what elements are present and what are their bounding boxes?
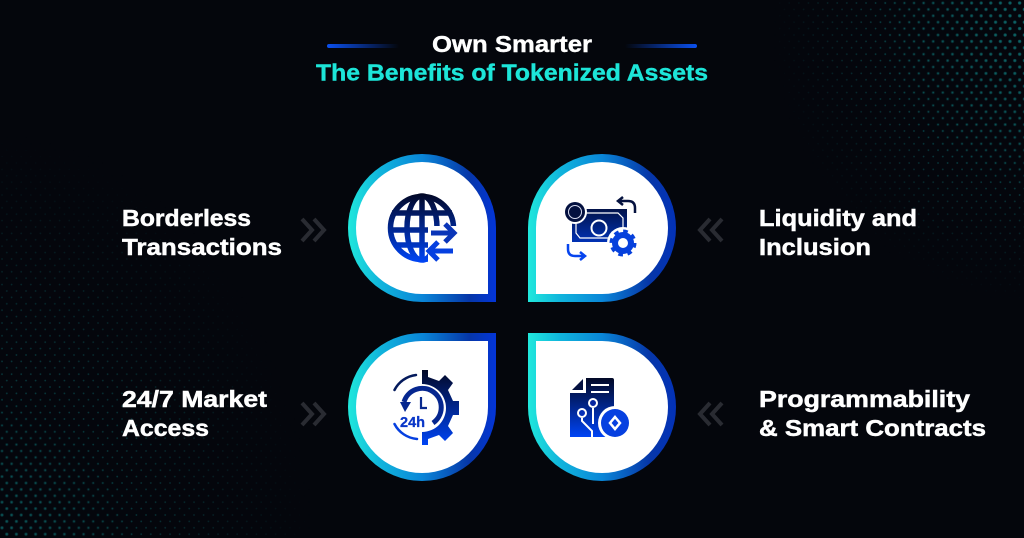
heading: Own Smarter: Own Smarter <box>432 31 592 57</box>
label: Liquidity and Inclusion: Inclusion <box>759 234 871 260</box>
label: Programmability & Smart Contracts: Programmability <box>759 386 970 412</box>
heading: The Benefits of Tokenized Assets: The Benefits of Tokenized Assets <box>316 60 708 86</box>
panel: 24/7 market access badge <box>348 333 496 481</box>
icon: globe with arrows <box>390 196 454 260</box>
label: Liquidity and Inclusion <box>759 205 917 260</box>
label: Borderless Transactions: Borderless <box>122 205 251 231</box>
panel: liquidity and inclusion badge <box>528 154 676 302</box>
arrow: chevrons top right <box>700 219 722 241</box>
icon: banknote with coin, gear and arrows <box>563 197 639 260</box>
label: 24/7 Market Access <box>122 386 267 441</box>
label: 24/7 Market Access: Access <box>122 415 209 441</box>
arrow: chevrons top left <box>302 219 324 241</box>
arrow: chevrons bottom left <box>302 403 324 425</box>
label: Borderless Transactions <box>122 205 282 260</box>
panel: programmability and smart contracts badge <box>528 333 676 481</box>
label: Programmability & Smart Contracts: & Smart Contracts <box>759 415 986 441</box>
icon: clock gear with 24h <box>394 370 459 445</box>
label: 24/7 Market Access: 24/7 Market <box>122 386 267 412</box>
arrow: chevrons bottom right <box>700 403 722 425</box>
label: Liquidity and Inclusion: Liquidity and <box>759 205 917 231</box>
icon: contract document with coin <box>570 378 632 440</box>
label: Programmability & Smart Contracts <box>759 386 986 441</box>
panel: borderless transactions badge <box>348 154 496 302</box>
label: Borderless Transactions: Transactions <box>122 234 282 260</box>
icon: clock gear with 24h: 24h <box>400 414 425 431</box>
title block <box>316 31 708 86</box>
